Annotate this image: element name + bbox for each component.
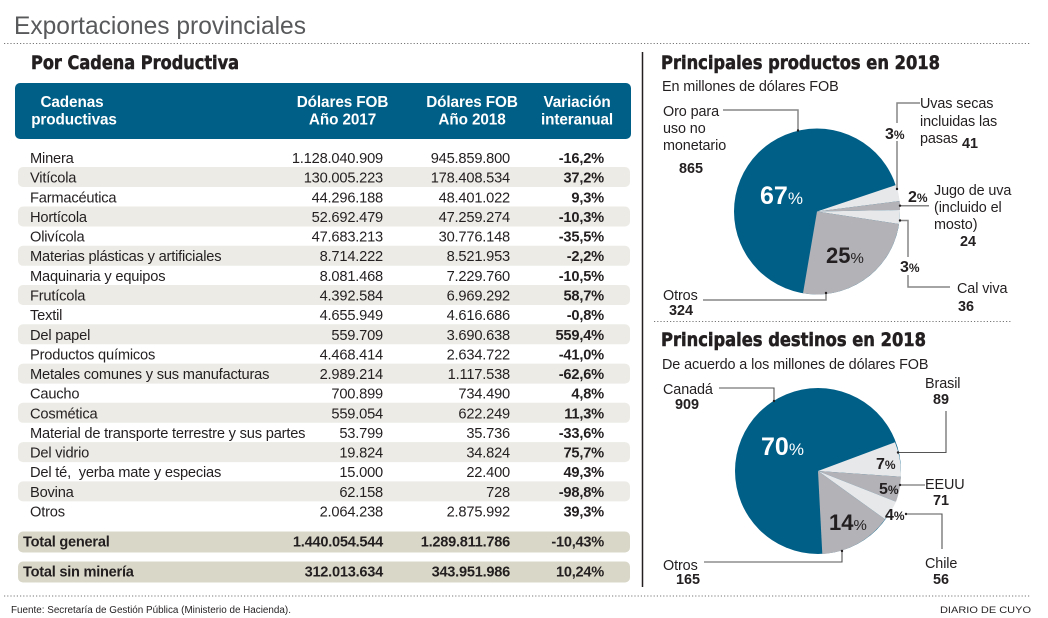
callout: canada — [663, 382, 775, 413]
table rows: 19.824 — [339, 446, 383, 462]
callout: jugo de uva — [899, 183, 1011, 250]
table rows: Olivícola — [30, 230, 85, 246]
total general — [18, 532, 630, 552]
callout: cal viva: 3% — [900, 259, 920, 276]
table rows: Maquinaria y equipos — [30, 269, 165, 285]
table header: Dólares FOB — [426, 94, 518, 111]
callout: cal viva — [899, 219, 1007, 315]
table rows: 4.616.686 — [447, 308, 510, 324]
total sin mineria: 343.951.986 — [432, 564, 510, 580]
table rows: -16,2% — [559, 151, 604, 167]
table rows: 15.000 — [339, 465, 383, 481]
table rows: 6.969.292 — [447, 288, 510, 304]
table rows: 11,3% — [564, 406, 604, 422]
table rows: 22.400 — [466, 465, 510, 481]
table rows: 34.824 — [466, 446, 510, 462]
value: 5%: 5% — [879, 481, 899, 498]
table rows: 1.128.040.909 — [292, 151, 383, 167]
table rows: Caucho — [30, 387, 79, 403]
callout: chile: 56 — [933, 572, 949, 588]
callout: uvas secas: Uvas secas — [920, 96, 993, 112]
table rows: Frutícola — [30, 288, 86, 304]
callout: jugo de uva: Jugo de uva — [934, 183, 1011, 199]
callout: uvas secas: incluidas las — [920, 114, 997, 130]
table rows: 62.158 — [339, 485, 383, 501]
callout: otros: Otros — [663, 288, 698, 304]
table rows: Otros — [30, 504, 65, 520]
callout: chile: Chile — [925, 556, 957, 572]
table rows: 559,4% — [555, 328, 604, 344]
callout: eeuu — [899, 477, 965, 509]
table rows: Hortícola — [30, 210, 88, 226]
callout: eeuu: EEUU — [925, 477, 965, 493]
callout: brasil: Brasil — [925, 376, 960, 392]
value: 70%: 70% — [761, 433, 804, 461]
table rows: 47.683.213 — [312, 230, 383, 246]
table rows: 8.081.468 — [320, 269, 383, 285]
table rows: Metales comunes y sus manufacturas — [30, 367, 269, 383]
table rows: 2.875.992 — [447, 504, 510, 520]
value: 14%: 14% — [829, 510, 867, 535]
callout: jugo de uva: (incluido el — [934, 200, 1002, 216]
table rows: 53.799 — [339, 426, 383, 442]
table rows: Del papel — [30, 328, 90, 344]
panel: principales destinos — [661, 329, 965, 588]
panel: por cadena productiva — [15, 52, 631, 582]
table rows: 49,3% — [563, 465, 604, 481]
total general: -10,43% — [551, 534, 604, 550]
panel: principales productos — [661, 52, 1011, 319]
table header: Dólares FOB — [297, 94, 388, 111]
callout: uvas secas: pasas — [920, 131, 958, 147]
total general: 1.440.054.544 — [293, 534, 384, 550]
callout: uvas secas: 3% — [885, 126, 905, 143]
callout: otros destinos: Otros — [663, 558, 698, 574]
callout: brasil — [897, 376, 960, 454]
table rows: -10,3% — [559, 210, 604, 226]
table rows: -98,8% — [559, 485, 604, 501]
value: 25%: 25% — [826, 243, 864, 268]
table rows: 2.634.722 — [447, 347, 510, 363]
callout: otros destinos: 165 — [676, 572, 700, 588]
total general: Total general — [23, 534, 110, 550]
table rows — [18, 151, 630, 520]
callout: canada: 909 — [675, 397, 699, 413]
table rows: Materias plásticas y artificiales — [30, 249, 221, 265]
table rows: 52.692.479 — [312, 210, 383, 226]
table header: Variación — [543, 94, 611, 111]
total sin mineria: Total sin minería — [23, 564, 135, 580]
callout: oro: 865 — [679, 161, 703, 177]
table rows: -62,6% — [559, 367, 604, 383]
table rows: 30.776.148 — [439, 230, 510, 246]
callout: canada: Canadá — [663, 382, 713, 398]
callout: oro: Oro para — [663, 104, 719, 120]
credit: DIARIO DE CUYO — [940, 605, 1031, 616]
callout: brasil: 89 — [933, 392, 949, 408]
table rows: 2.989.214 — [320, 367, 383, 383]
table rows: Cosmética — [30, 406, 98, 422]
table rows: 47.259.274 — [439, 210, 510, 226]
table rows: 945.859.800 — [431, 151, 510, 167]
table header: productivas — [31, 112, 117, 128]
heading: principales productos: Principales productos en 2018 — [661, 52, 940, 74]
total sin mineria: 10,24% — [556, 564, 604, 580]
table rows: 39,3% — [563, 504, 604, 520]
table rows: -41,0% — [559, 347, 604, 363]
table rows: 35.736 — [466, 426, 510, 442]
heading: por cadena productiva: Por Cadena Productiva — [31, 52, 239, 74]
source note: Fuente: Secretaría de Gestión Pública (Ministerio de Hacienda). — [11, 605, 291, 616]
value: 67%: 67% — [760, 182, 803, 210]
table rows: 734.490 — [458, 387, 510, 403]
table rows: 7.229.760 — [447, 269, 510, 285]
callout: otros — [663, 288, 827, 319]
table rows: 1.117.538 — [448, 367, 510, 383]
table rows: Bovina — [30, 485, 75, 501]
table header: Año 2017 — [309, 112, 376, 128]
table rows: 4.468.414 — [320, 347, 383, 363]
table rows: 4.392.584 — [320, 288, 383, 304]
total general: 1.289.811.786 — [421, 534, 510, 550]
table header: Cadenas — [40, 94, 104, 111]
callout: jugo de uva: 2% — [908, 189, 928, 206]
table rows: -33,6% — [559, 426, 604, 442]
callout: uvas secas — [884, 96, 997, 190]
table rows: 9,3% — [571, 190, 604, 206]
table rows: Farmacéutica — [30, 190, 117, 206]
table header — [15, 83, 631, 139]
table rows: 37,2% — [563, 171, 604, 187]
title: Exportaciones provinciales — [14, 12, 306, 40]
callout: uvas secas: 41 — [962, 136, 978, 152]
value: 7%: 7% — [876, 456, 896, 473]
table header: interanual — [541, 112, 613, 128]
table rows: 728 — [486, 485, 510, 501]
table rows: 559.054 — [331, 406, 383, 422]
table rows: Material de transporte terrestre y sus partes — [30, 426, 305, 442]
callout: jugo de uva: 24 — [960, 234, 976, 250]
callout: cal viva: 36 — [958, 299, 974, 315]
callout: jugo de uva: mosto) — [934, 217, 977, 233]
table rows: 700.899 — [331, 387, 383, 403]
table rows: 8.714.222 — [320, 249, 383, 265]
table rows: 559.709 — [331, 328, 383, 344]
heading: principales destinos: Principales destinos en 2018 — [661, 329, 926, 351]
subtitle: productos: En millones de dólares FOB — [662, 79, 839, 95]
table rows: Del té, yerba mate y especias — [30, 465, 221, 481]
callout: otros: 324 — [669, 303, 693, 319]
callout: oro: uso no — [663, 121, 706, 137]
table rows: 2.064.238 — [320, 504, 383, 520]
value: 4%: 4% — [885, 507, 905, 524]
table rows: 4.655.949 — [320, 308, 383, 324]
callout: chile — [905, 513, 957, 588]
callout: oro — [663, 104, 799, 177]
table rows: Del vidrio — [30, 446, 89, 462]
total sin mineria: 312.013.634 — [305, 564, 384, 580]
subtitle: destinos: De acuerdo a los millones de dólares FOB — [662, 357, 928, 373]
table rows: 48.401.022 — [439, 190, 510, 206]
pie chart: destinos — [735, 388, 901, 554]
table rows: Textil — [30, 308, 62, 324]
table rows: 75,7% — [563, 446, 604, 462]
table rows: Vitícola — [30, 171, 77, 187]
table rows: -0,8% — [567, 308, 604, 324]
pie chart: productos — [734, 128, 900, 294]
table rows: -2,2% — [567, 249, 604, 265]
table rows: 58,7% — [563, 288, 604, 304]
table rows: 4,8% — [571, 387, 604, 403]
table rows: -10,5% — [559, 269, 604, 285]
table rows: 622.249 — [458, 406, 510, 422]
table rows: 8.521.953 — [447, 249, 510, 265]
table rows: 178.408.534 — [431, 171, 510, 187]
callout: oro: monetario — [663, 138, 726, 154]
callout: otros destinos — [663, 550, 843, 588]
callout: eeuu: 71 — [933, 493, 949, 509]
table rows: Minera — [30, 151, 75, 167]
total sin mineria — [18, 562, 630, 582]
table rows: Productos químicos — [30, 347, 155, 363]
table rows: 44.296.188 — [312, 190, 383, 206]
callout: cal viva: Cal viva — [957, 281, 1007, 297]
table rows: 3.690.638 — [447, 328, 510, 344]
table header: Año 2018 — [438, 112, 506, 128]
table rows: -35,5% — [559, 230, 604, 246]
table rows: 130.005.223 — [304, 171, 383, 187]
